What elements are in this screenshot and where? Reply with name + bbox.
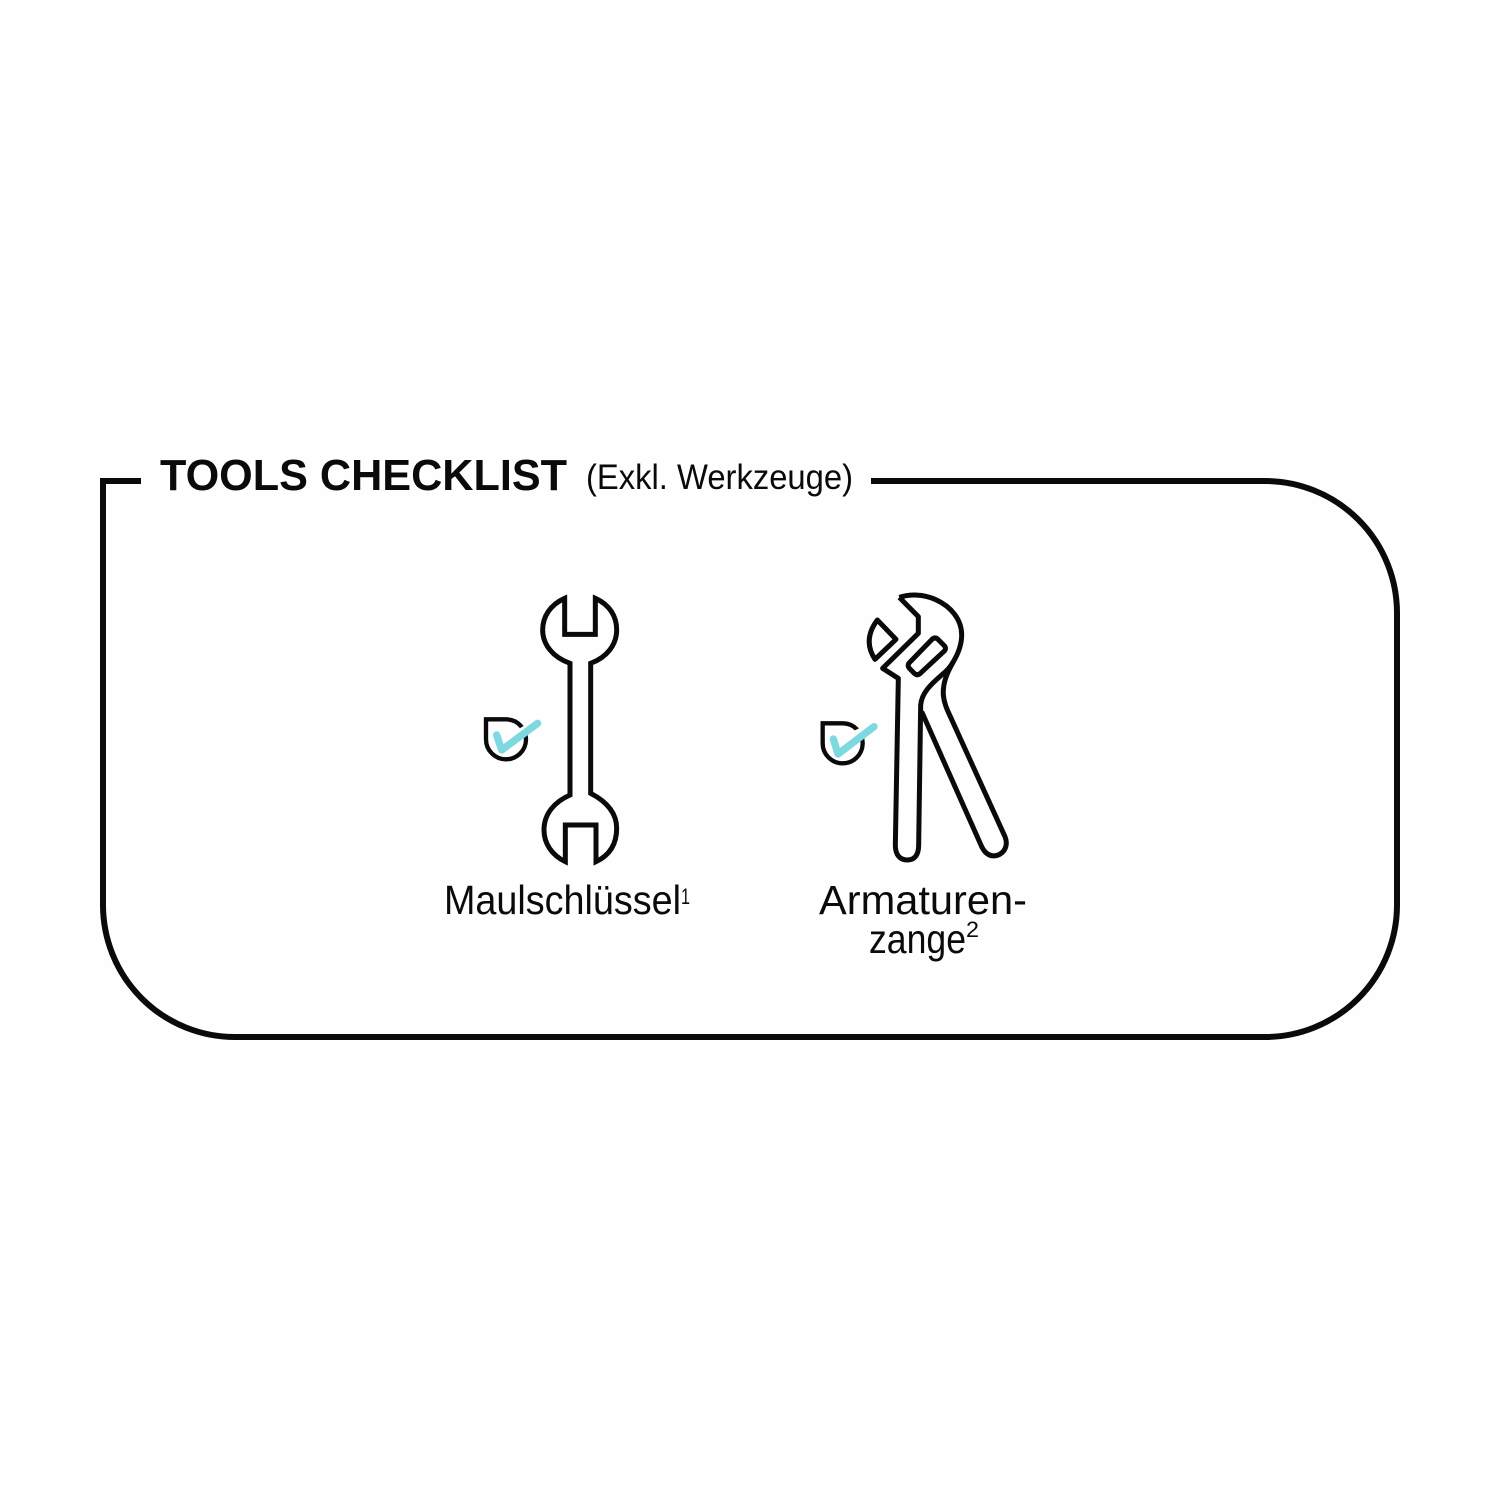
panel: rounded checklist frame [103,481,1397,1037]
label: Maulschlüssel: Maulschlüssel [444,877,681,923]
label: Armaturenzange: Armaturen- [819,877,1027,923]
icon: wrench check badge [486,719,538,759]
heading: tools checklist: TOOLS CHECKLIST [160,451,567,500]
icon: pliers check badge [823,723,874,763]
label: Armaturenzange: zange [869,916,966,962]
label: Armaturenzange [819,877,1027,962]
footnote marker 1: 1 [681,884,690,909]
subheading: exclusive tools: (Exkl. Werkzeuge) [586,458,853,497]
label: Armaturenzange: 2 [966,917,979,942]
icon: open-end wrench [543,598,617,862]
icon: adjustable pliers [869,595,1006,860]
